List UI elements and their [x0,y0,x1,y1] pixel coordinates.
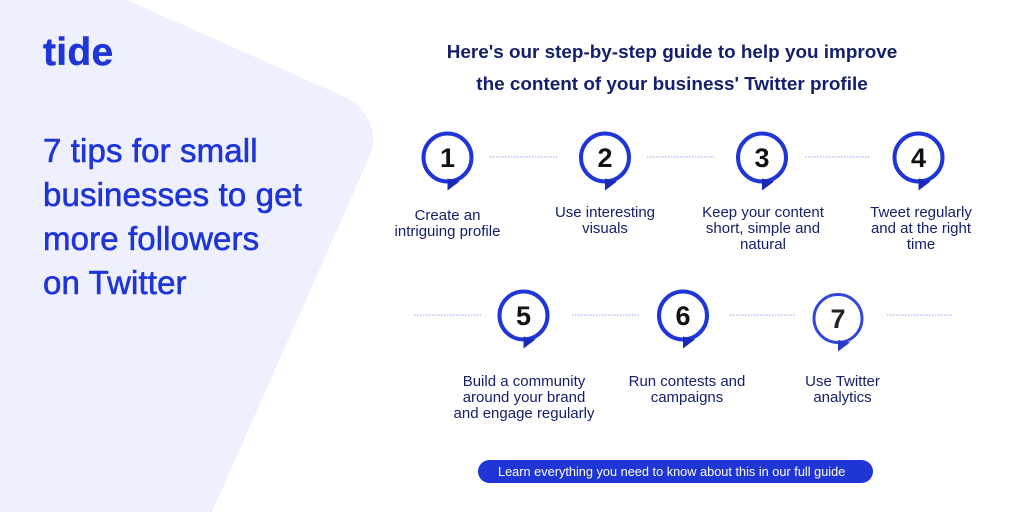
step 5 label: and engage regularly [454,405,594,422]
icon: badge 1: 1 [440,143,455,173]
icon: badge 2: 2 [597,143,613,173]
connector dots [414,157,953,315]
step 1 label: intriguing profile [395,223,500,240]
step 5 label [454,373,594,422]
step 3 label: short, simple and [706,220,820,237]
icon: badge 6: 6 [675,301,691,331]
step 5 label: around your brand [463,389,585,406]
step 1 label: Create an [415,207,480,224]
title: on Twitter [43,264,187,301]
step 2 label: visuals [582,220,628,237]
call to action button: Learn everything you need to know about this in our full guide [498,464,845,479]
step 4 label: time [907,236,935,253]
heading [447,42,897,95]
step 7 label [805,373,880,406]
step 6 label: campaigns [651,389,723,406]
title: businesses to get [43,176,302,213]
icon: badge 6 [659,292,707,348]
icon: badge 3: 3 [754,143,770,173]
step 6 label [629,373,745,406]
step 5 label: Build a community [463,373,585,390]
icon: badge 2 [581,134,629,190]
step 4 label: Tweet regularly [870,204,972,221]
step 7 label: analytics [813,389,872,406]
step 7 label: Use Twitter [805,373,880,390]
step 3 label: natural [740,236,786,253]
icon: badge 5 [500,292,548,348]
icon: badge 4 [894,134,942,190]
icon: badge 1 [424,134,472,190]
icon: badge 7 [814,294,862,352]
step 4 label: and at the right [871,220,971,237]
title [43,132,302,301]
heading: Here's our step-by-step guide to help you improve [447,42,897,63]
step 3 label [702,204,824,253]
step 2 label [555,204,655,237]
icon: badge 4: 4 [911,143,926,173]
icon: badge 5: 5 [516,301,531,331]
heading: the content of your business' Twitter profile [476,74,868,95]
step 1 label [395,207,500,240]
step 6 label: Run contests and [629,373,745,390]
icon: badge 3 [738,134,786,190]
logo: tide: tide [43,31,114,74]
step 4 label [870,204,972,253]
step 2 label: Use interesting [555,204,655,221]
step 3 label: Keep your content [702,204,824,221]
title: more followers [43,220,259,257]
icon: badge 7: 7 [830,304,846,334]
title: 7 tips for small [43,132,258,169]
call to action button [478,460,873,483]
